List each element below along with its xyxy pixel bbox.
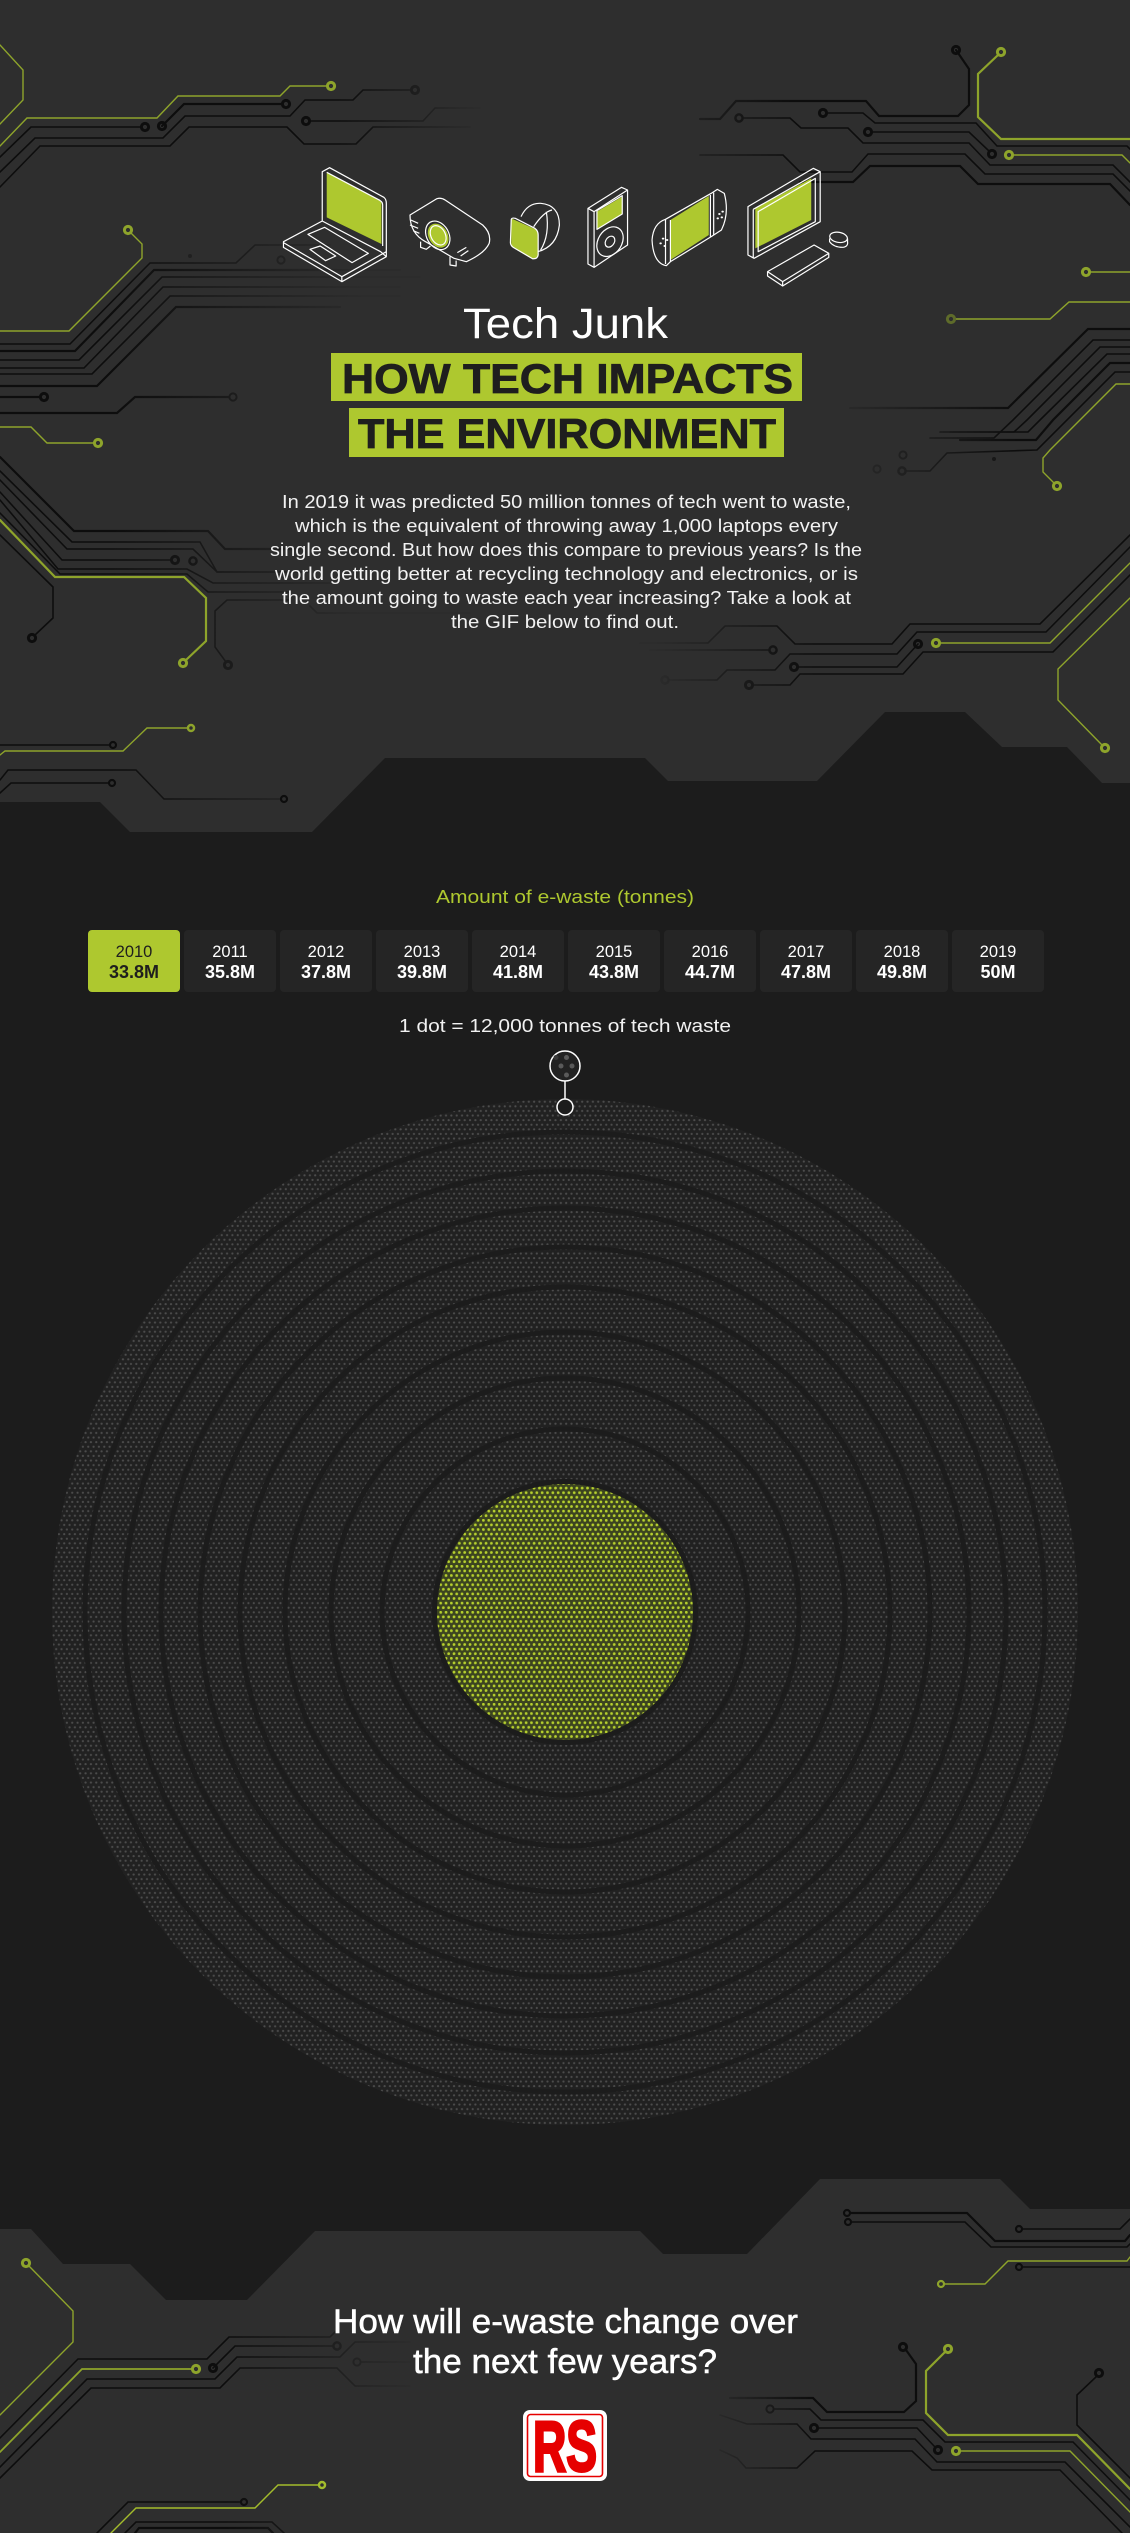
tile: 2012: 2012 — [308, 943, 344, 961]
tile: 2014 — [472, 930, 564, 992]
dot chart: concentric rings of e-waste — [52, 1099, 1078, 2125]
circuit traces: top left — [0, 45, 480, 187]
heading bar: how tech impacts: HOW TECH IMPACTS — [342, 355, 793, 402]
tile: 2011 — [184, 930, 276, 992]
logo: RS: RS — [533, 2408, 597, 2487]
tile: 2016: 44.7M — [685, 962, 735, 982]
intro text block: In 2019 it was predicted 50 million tonnes of tech went to waste, — [282, 492, 851, 512]
centre: 2010 highlighted dots — [432, 1479, 698, 1745]
tile: 2018: 49.8M — [877, 962, 927, 982]
circuit traces: bottom right — [720, 2210, 1130, 2533]
tile: 2013: 2013 — [404, 943, 440, 961]
closing question — [333, 2303, 798, 2381]
tile: 2018: 2018 — [884, 943, 920, 961]
circuit traces: top right — [700, 46, 1130, 323]
section label: amount of e-waste: Amount of e-waste (tonnes) — [436, 887, 694, 907]
circuit traces: right lower — [640, 329, 1130, 752]
tile: 2015 — [568, 930, 660, 992]
intro text block — [270, 492, 862, 632]
intro text block: single second. But how does this compare to previous years? Is the — [270, 540, 862, 560]
tile: 2014: 2014 — [500, 943, 536, 961]
logo: RS — [523, 2408, 607, 2487]
intro text block: world getting better at recycling technology and electronics, or is — [274, 564, 858, 584]
tile: 2012: 37.8M — [301, 962, 351, 982]
icon: projector — [410, 198, 490, 266]
circuit traces: left middle — [0, 226, 420, 413]
legend: 1 dot equals 12,000 tonnes: 1 dot = 12,000 tonnes of tech waste — [399, 1016, 731, 1036]
tile: 2010 active — [88, 930, 180, 992]
year selector tiles — [88, 930, 1044, 992]
icon: desktop computer — [748, 168, 849, 286]
callout: dot magnifier — [550, 1051, 580, 1115]
heading bar: the environment: THE ENVIRONMENT — [358, 410, 776, 457]
tile: 2019: 50M — [980, 962, 1016, 982]
icon: music player — [588, 187, 628, 267]
title: Tech Junk: Tech Junk — [463, 300, 669, 348]
tile: 2017: 2017 — [788, 943, 824, 961]
tile: 2015: 43.8M — [589, 962, 639, 982]
outer dot field — [52, 1099, 1078, 2125]
tile: 2018 — [856, 930, 948, 992]
icon: laptop — [283, 168, 386, 282]
tile: 2016: 2016 — [692, 943, 728, 961]
icons: tech devices — [283, 168, 849, 286]
circuit traces: bottom left — [0, 2259, 410, 2533]
tile: 2019: 2019 — [980, 943, 1016, 961]
footer panel background — [0, 2179, 1130, 2533]
tile: 2017: 47.8M — [781, 962, 831, 982]
intro text block: which is the equivalent of throwing away 1,000 laptops every — [294, 516, 838, 536]
tile: 2019 — [952, 930, 1044, 992]
intro text block: the GIF below to find out. — [451, 612, 679, 632]
circuit traces: left lower — [0, 427, 470, 802]
tile: 2015: 2015 — [596, 943, 632, 961]
tile: 2010 active: 2010 — [116, 943, 152, 961]
tile: 2014: 41.8M — [493, 962, 543, 982]
tile: 2011: 2011 — [212, 943, 248, 961]
tile: 2011: 35.8M — [205, 962, 255, 982]
tile: 2016 — [664, 930, 756, 992]
icon: handheld console — [652, 189, 726, 266]
tile: 2013 — [376, 930, 468, 992]
closing question: How will e-waste change over — [333, 2303, 798, 2341]
tile: 2013: 39.8M — [397, 962, 447, 982]
icon: smart watch — [510, 203, 559, 259]
header panel background — [0, 0, 1130, 832]
ring gaps between years — [85, 1132, 1045, 2092]
closing question: the next few years? — [413, 2343, 717, 2381]
tile: 2017 — [760, 930, 852, 992]
tile: 2012 — [280, 930, 372, 992]
tile: 2010 active: 33.8M — [109, 962, 159, 982]
intro text block: the amount going to waste each year increasing? Take a look at — [282, 588, 851, 608]
